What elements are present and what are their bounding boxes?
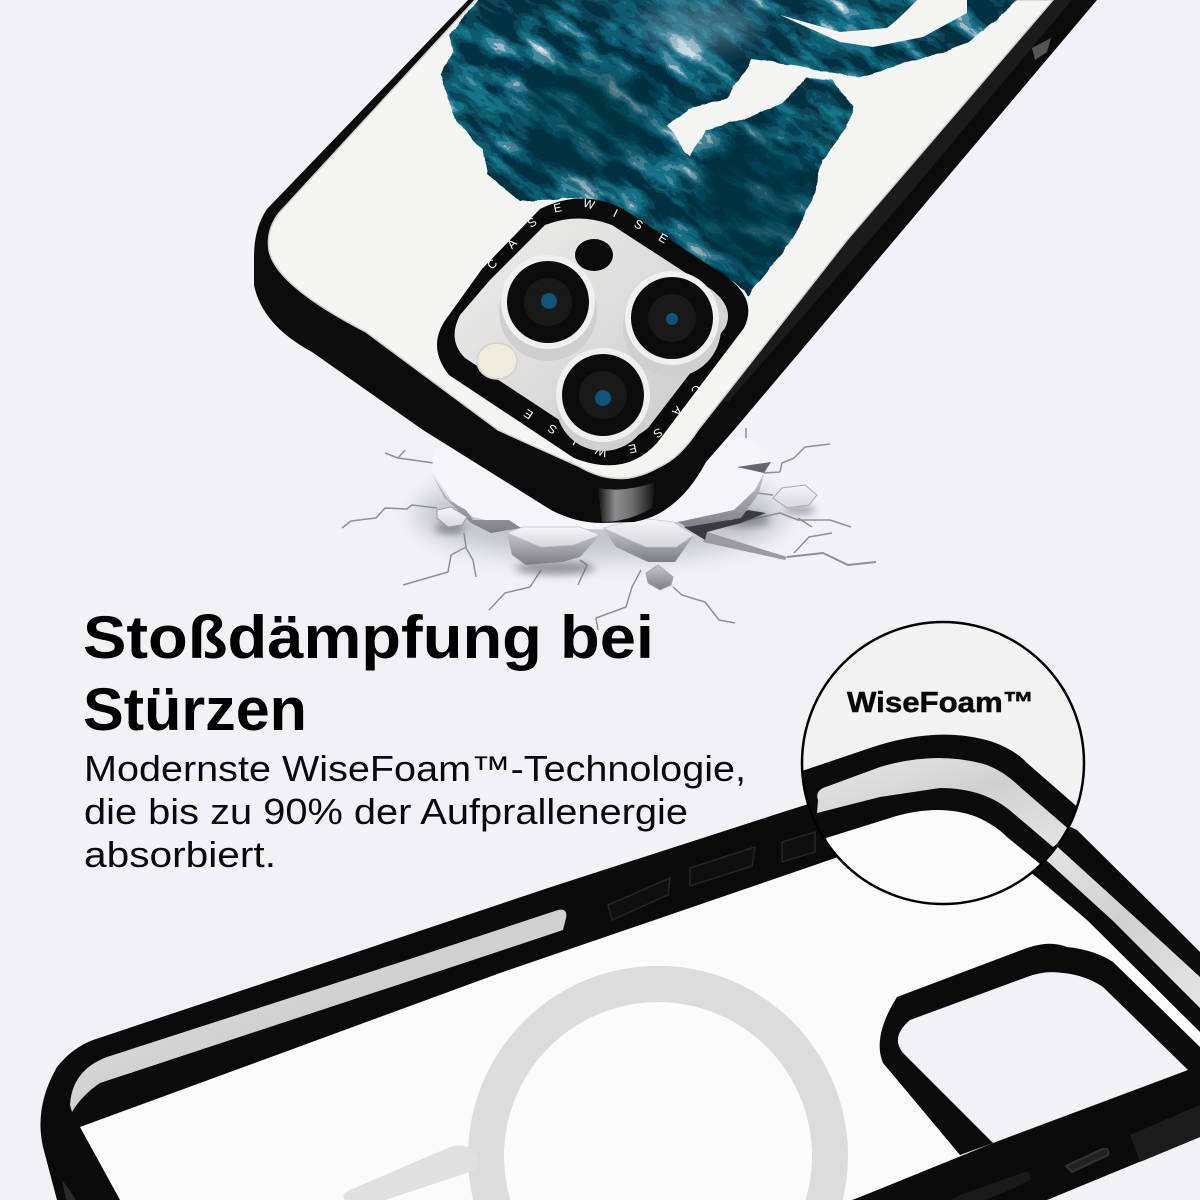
marble ocean artwork	[440, 0, 1017, 296]
impact shadow	[415, 470, 785, 560]
right grey foam strip	[1035, 840, 1200, 1008]
small bottom chunk	[646, 565, 673, 590]
heading	[83, 604, 654, 743]
black case frame	[40, 770, 1200, 1200]
lens right	[623, 271, 721, 377]
right side sheen	[715, 0, 1072, 402]
left port	[62, 1180, 76, 1200]
side button	[1032, 38, 1051, 60]
dark gap right	[684, 510, 766, 540]
small left chunk	[437, 507, 467, 527]
center-left chunk top	[507, 527, 600, 547]
bottom phone case interior view	[40, 770, 1200, 1200]
shadows under chunks	[435, 506, 816, 575]
body text: die bis zu 90% der Aufprallenergie	[84, 791, 688, 832]
center-right chunk side	[603, 528, 694, 562]
clear back interior	[80, 815, 1200, 1200]
case black bumper	[254, 0, 1097, 523]
top phone with case	[254, 0, 1097, 523]
white ribbon in artwork	[780, 0, 967, 47]
center-right chunk top	[603, 518, 694, 547]
body text	[84, 748, 746, 875]
camera cutout	[880, 944, 1200, 1155]
alignment bar	[343, 1145, 479, 1200]
case bottom highlight	[598, 482, 655, 522]
left broken plate	[432, 400, 771, 530]
speaker port	[1066, 1149, 1108, 1172]
microphone hole	[575, 239, 613, 271]
magnified frame detail	[804, 734, 1076, 902]
heading: Stürzen	[83, 676, 307, 743]
left grey foam strip	[70, 910, 566, 1112]
left plate edge	[431, 472, 521, 533]
side buttons	[608, 832, 815, 920]
casewise lettering top: CASEWISE	[488, 198, 668, 268]
lens top-left	[499, 255, 597, 361]
lower frame side detail	[1130, 1105, 1200, 1162]
bottom button	[950, 1172, 1030, 1200]
lens bottom	[556, 348, 650, 451]
body text: Modernste WiseFoam™-Technologie,	[84, 748, 746, 789]
wedge crack right	[703, 532, 787, 560]
center-left chunk side	[507, 533, 600, 565]
casewise lettering bottom: CASEWISE	[523, 386, 700, 458]
heading: Stoßdämpfung bei	[83, 604, 654, 671]
camera plateau	[455, 218, 728, 442]
magnifier outline	[802, 622, 1084, 904]
dark wedge	[737, 462, 771, 473]
clear back panel	[268, 0, 1053, 478]
camera bump ring	[437, 198, 748, 465]
magnifier fill	[802, 622, 1084, 904]
cutout opening	[898, 972, 1188, 1143]
wisefoam label: WiseFoam™	[847, 687, 1034, 719]
pebble	[773, 485, 817, 508]
dark water patches	[515, 60, 655, 180]
right plate edge	[678, 473, 764, 527]
body text: absorbiert.	[84, 834, 276, 875]
magnifier callout	[790, 622, 1090, 920]
crack lines	[342, 428, 876, 630]
flash	[477, 343, 517, 379]
cracked wall impact	[342, 400, 876, 630]
magnetic ring	[468, 966, 848, 1200]
